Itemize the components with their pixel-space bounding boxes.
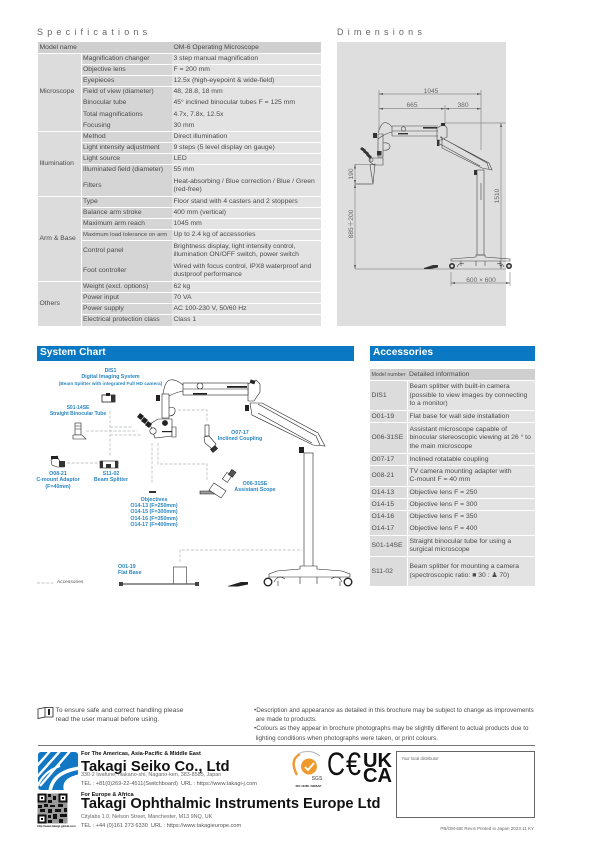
junction bbox=[437, 124, 447, 140]
microscope stand bbox=[150, 380, 352, 586]
table: specifications: Power supply bbox=[83, 305, 124, 312]
company block: Takagi Seiko: Takagi Seiko Co., Ltd bbox=[81, 758, 230, 774]
diagram: dimensions of microscope: 1510 bbox=[494, 188, 501, 203]
curved neck bbox=[163, 380, 183, 400]
label: DIS1: DIS1 bbox=[105, 368, 116, 374]
table: specifications: 3 step manual magnification bbox=[174, 55, 258, 62]
table: specifications: Control panel bbox=[83, 247, 123, 254]
table: accessories: Straight binocular tube for using a bbox=[410, 538, 511, 545]
QR caption: http://www.takagi-global.com bbox=[37, 824, 76, 828]
table: specifications: Microscope bbox=[40, 88, 74, 95]
table: accessories: Model number bbox=[372, 372, 405, 378]
diagram: dimensions of microscope: 1045 bbox=[424, 88, 439, 95]
diagram: dimensions of microscope: 190 bbox=[348, 168, 355, 180]
table: accessories: C-mount F = 40 mm bbox=[410, 476, 470, 483]
table: accessories: (spectroscopic ratio: ■ 30 : ♟ 70) bbox=[410, 572, 509, 579]
label: O07-17: O07-17 bbox=[231, 430, 249, 436]
table: specifications: Filters bbox=[83, 182, 102, 189]
label: DIS1 bbox=[59, 368, 162, 386]
icon: O08-21 C-mount adaptor bbox=[51, 456, 65, 467]
lower arm bbox=[250, 403, 325, 446]
table: accessories: Objective lens F = 250 bbox=[410, 489, 477, 496]
table: specifications: 55 mm bbox=[174, 166, 194, 173]
table: specifications: Magnification changer bbox=[83, 55, 150, 62]
note: disclaimers: •Colours as they appear in brochure photographs may be slightly different to actual products due to bbox=[254, 725, 528, 732]
table: accessories: O08-21 bbox=[372, 472, 394, 479]
table: accessories: Beam splitter with built-in camera bbox=[410, 383, 510, 390]
table: accessories: (possible to view images by connecting bbox=[410, 392, 527, 399]
table: accessories: Objective lens F = 400 bbox=[410, 525, 477, 532]
table: specifications: Maximum load tolerance on arm bbox=[83, 232, 167, 238]
table: accessories bbox=[370, 369, 535, 586]
certification marks: SGS, CE, UKCA: UK bbox=[363, 750, 393, 772]
table: specifications: Type bbox=[83, 198, 98, 205]
label: O07-17: Inclined Coupling bbox=[218, 436, 262, 442]
label: objectives: O14-16 (F=350mm) bbox=[130, 516, 178, 522]
label: O01-19 bbox=[118, 564, 142, 576]
O01-19 flat base bbox=[119, 567, 199, 586]
label: O08-21: C-mount Adaptor bbox=[36, 477, 80, 483]
company block: Takagi Seiko: For The Americas, Asia-Pacific & Middle East bbox=[81, 751, 201, 757]
box: local distributor: Your local distributor bbox=[402, 756, 438, 761]
company block: Takagi Ophthalmic Instruments: For Europe & Africa bbox=[81, 792, 134, 798]
note: disclaimers: are made to products. bbox=[256, 716, 317, 723]
note: user manual: read the user manual before using. bbox=[56, 716, 159, 723]
head bbox=[356, 158, 383, 184]
table: specifications: Electrical protection class bbox=[83, 316, 160, 323]
body tube bbox=[162, 394, 169, 418]
table: accessories: Objective lens F = 300 bbox=[410, 501, 477, 508]
table: accessories: O14-15 bbox=[372, 501, 394, 508]
table: specifications: Direct illumination bbox=[174, 133, 227, 140]
table: specifications: F = 200 mm bbox=[174, 66, 210, 73]
table: specifications: Heat-absorbing / Blue correction / Blue / Green bbox=[174, 178, 315, 185]
company block: Takagi Ophthalmic Instruments: Citylabs 1.0, Nelson Street, Manchester, M13 9NQ, UK bbox=[81, 814, 212, 820]
label: S11-02 bbox=[94, 471, 128, 483]
label: DIS1: (Beam Splitter with integrated Full HD camera) bbox=[59, 381, 162, 386]
diagram: dimensions of microscope: 600 × 600 bbox=[466, 277, 496, 284]
table: specifications: 400 mm (vertical) bbox=[174, 209, 226, 216]
loop handle bbox=[169, 408, 175, 416]
table: specifications: Up to 2.4 kg of accessories bbox=[174, 231, 255, 238]
table: accessories: the main microscope bbox=[410, 442, 472, 450]
table: specifications: dustproof performance bbox=[174, 271, 242, 278]
company block: Takagi Ophthalmic Instruments: TEL : +44 (0)161 273 6330 URL : https://www.takagieurope.com bbox=[81, 822, 241, 828]
table: accessories: O01-19 bbox=[372, 413, 394, 420]
body tube bbox=[378, 134, 390, 157]
table: accessories: O14-17 bbox=[372, 525, 394, 532]
upper arm bbox=[183, 383, 248, 395]
table: specifications: 4.7x, 7.8x, 12.5x bbox=[174, 111, 223, 118]
caster wheels bbox=[264, 578, 272, 586]
note: disclaimers: lighting conditions when photographs were taken, or print colours. bbox=[256, 735, 438, 742]
icon: S11-02 beam splitter bbox=[100, 461, 118, 468]
table: accessories: O14-13 bbox=[372, 489, 394, 496]
table: accessories: S11-02 bbox=[372, 568, 393, 575]
table: specifications: 45° inclined binocular tubes F = 125 mm bbox=[174, 99, 295, 106]
company block: Takagi Seiko: TEL : +81(0)269-22-4511(Switchboard) URL : https://www.takagi-j.com bbox=[81, 780, 257, 786]
label: S01-14SE: S01-14SE bbox=[67, 405, 89, 411]
table: specifications: Method bbox=[83, 133, 106, 140]
label: O01-19: Flat Base bbox=[118, 570, 142, 576]
table: specifications: Weight (excl. options) bbox=[83, 283, 148, 290]
box: local distributor bbox=[396, 751, 535, 818]
label: O08-21 bbox=[36, 471, 80, 490]
section header: Accessories: Accessories bbox=[373, 347, 433, 358]
icon: DIS1 camera bbox=[102, 393, 115, 402]
table: specifications: Floor stand with 4 casters and 2 stoppers bbox=[174, 198, 298, 205]
table: specifications: Light intensity adjustment bbox=[83, 144, 160, 151]
label: O06-31SE: O06-31SE bbox=[243, 481, 267, 487]
table: specifications: Wired with focus control, IPX8 waterproof and bbox=[174, 263, 311, 270]
label: objectives: O14-13 (F=250mm) bbox=[130, 503, 178, 509]
table: accessories: O07-17 bbox=[372, 456, 394, 463]
table: accessories: to a monitor) bbox=[410, 400, 448, 407]
table: accessories: Detailed information bbox=[409, 371, 469, 378]
label: O06-31SE: Assistant Scope bbox=[234, 487, 276, 493]
diagram: dimensions of microscope: 665 bbox=[406, 102, 418, 109]
table: specifications: Objective lens bbox=[83, 66, 126, 73]
table: accessories: Flat base for wall side installation bbox=[410, 413, 509, 420]
junction bbox=[248, 380, 260, 401]
table: specifications: Balance arm stroke bbox=[83, 209, 142, 216]
table: accessories: Beam splitter for mounting a camera bbox=[410, 563, 519, 570]
label: O08-21: (F=40mm) bbox=[45, 484, 71, 490]
table: specifications bbox=[38, 42, 321, 326]
company block: Takagi Ophthalmic Instruments: Takagi Ophthalmic Instruments Europe Ltd bbox=[81, 796, 380, 812]
table: specifications: Model name bbox=[40, 44, 77, 51]
note: user manual: To ensure safe and correct handling please bbox=[56, 706, 183, 714]
foot controller bbox=[228, 582, 248, 586]
icon: O06-31SE assistant scope bbox=[200, 469, 236, 498]
icon: objective lens bbox=[149, 491, 156, 493]
base bbox=[451, 255, 510, 267]
table: specifications: LED bbox=[174, 155, 187, 162]
table: accessories: O06-31SE bbox=[372, 434, 403, 441]
label: objectives: Objectives bbox=[141, 496, 167, 502]
table: accessories: surgical microscope bbox=[410, 546, 470, 553]
table: specifications: Light source bbox=[83, 155, 120, 162]
note: user manual bbox=[56, 706, 184, 723]
table: specifications: Field of view (diameter) bbox=[83, 88, 154, 95]
certification marks: SGS, CE, UKCA: CA bbox=[363, 765, 392, 787]
note: disclaimers: •Description and appearance as detailed in this brochure may be subject to change as improvements bbox=[254, 706, 534, 714]
table: specifications: illumination ON/OFF switch, power switch bbox=[174, 251, 299, 258]
table: accessories: DIS1 bbox=[372, 392, 387, 399]
certification marks: SGS, CE, UKCA: SGS bbox=[312, 776, 323, 782]
print reference: PB/OM-6IE Rev.6 Printed in Japan 2023.11 KY bbox=[440, 826, 534, 830]
table: specifications: Eyepieces bbox=[83, 77, 114, 84]
table: specifications: AC 100-230 V, 50/60 Hz bbox=[174, 305, 247, 312]
certification marks: SGS, CE, UKCA: C bbox=[327, 746, 345, 782]
table: specifications: Focusing bbox=[83, 122, 111, 129]
table: specifications: 48, 28.8, 18 mm bbox=[174, 88, 223, 95]
heading: Specifications: Specifications bbox=[37, 27, 151, 37]
table: accessories: Objective lens F = 350 bbox=[410, 513, 477, 520]
label: O01-19: O01-19 bbox=[118, 564, 136, 570]
certification marks: SGS, CE, UKCA: ISO 13485 / MDSAP bbox=[296, 784, 322, 788]
table: specifications: Class 1 bbox=[174, 316, 196, 323]
table: specifications: Others bbox=[40, 300, 60, 307]
note: disclaimers bbox=[254, 706, 534, 742]
table: specifications: Maximum arm reach bbox=[83, 220, 145, 227]
certification marks: SGS, CE, UKCA: € bbox=[346, 746, 361, 782]
dashed connector lines bbox=[37, 410, 302, 583]
table: specifications: 1045 mm bbox=[174, 220, 202, 227]
head bbox=[150, 419, 172, 438]
section header: Accessories bbox=[370, 346, 535, 360]
table: specifications: Illuminated field (diameter) bbox=[83, 166, 163, 173]
section header: System Chart bbox=[37, 346, 354, 360]
curved neck bbox=[378, 122, 392, 139]
eyepiece bands bbox=[137, 413, 152, 428]
table: accessories: binocular stereoscopic viewing at 26 ° to bbox=[410, 434, 531, 441]
table: specifications: 9 steps (5 level display on gauge) bbox=[174, 144, 275, 151]
label: objectives: O14-15 (F=300mm) bbox=[130, 509, 178, 515]
panel: dimensions drawing bbox=[337, 42, 506, 326]
table: specifications: Illumination bbox=[40, 160, 74, 167]
label: S11-02: S11-02 bbox=[103, 471, 119, 477]
label: S11-02: Beam Splitter bbox=[94, 477, 128, 483]
table: specifications: (red-free) bbox=[174, 186, 202, 193]
divider bbox=[38, 745, 535, 746]
table: specifications: Power input bbox=[83, 294, 119, 301]
table: specifications: Brightness display, light intensity control, bbox=[174, 243, 295, 250]
stand column bbox=[477, 170, 484, 255]
section header: System Chart: System Chart bbox=[40, 347, 106, 358]
table: accessories: S01-14SE bbox=[372, 542, 402, 549]
diagram: dimensions of microscope: 885＋200 bbox=[347, 209, 355, 238]
label: S01-14SE bbox=[50, 405, 106, 417]
company block: Takagi Seiko: 330-2 Iwafune, Nakano-shi, Nagano-ken, 383-8585, Japan bbox=[81, 772, 221, 778]
table: accessories: TV camera mounting adapter with bbox=[410, 468, 512, 475]
label: O06-31SE bbox=[234, 481, 276, 493]
table: specifications: Arm & Base bbox=[40, 235, 76, 242]
label: S01-14SE: Straight Binocular Tube bbox=[50, 411, 106, 417]
table: specifications: 62 kg bbox=[174, 283, 190, 290]
label: O08-21: O08-21 bbox=[49, 471, 67, 477]
label: DIS1: Digital Imaging System bbox=[81, 374, 140, 380]
table: accessories: O14-16 bbox=[372, 513, 394, 520]
company block: Takagi Seiko bbox=[81, 751, 257, 786]
table: specifications: Foot controller bbox=[83, 267, 126, 274]
icon: O07-17 inclined coupling bbox=[204, 425, 218, 452]
legend: accessories: Accessories bbox=[57, 580, 83, 585]
company block: Takagi Ophthalmic Instruments bbox=[81, 792, 380, 828]
label: O07-17 bbox=[218, 430, 262, 442]
table: specifications: 30 mm bbox=[174, 122, 194, 129]
table: accessories: Inclined rotatable coupling bbox=[410, 456, 488, 463]
table: specifications: 12.5x (high-eyepoint & wide-field) bbox=[174, 77, 274, 84]
lower arm bbox=[440, 137, 492, 170]
label: objectives bbox=[130, 496, 178, 528]
table: specifications: 70 VA bbox=[174, 294, 192, 301]
upper arm bbox=[392, 126, 438, 136]
table: accessories: Assistant microscope capable of bbox=[410, 426, 507, 433]
table: specifications: Total magnifications bbox=[83, 111, 143, 118]
heading: Dimensions: Dimensions bbox=[337, 27, 426, 37]
label: objectives: O14-17 (F=400mm) bbox=[130, 522, 178, 528]
diagram: dimensions of microscope: 380 bbox=[457, 102, 469, 109]
table: specifications: Binocular tube bbox=[83, 99, 126, 106]
table: specifications: OM-6 Operating Microscope bbox=[174, 44, 259, 51]
icon: S01-14SE straight tube bbox=[73, 423, 86, 439]
